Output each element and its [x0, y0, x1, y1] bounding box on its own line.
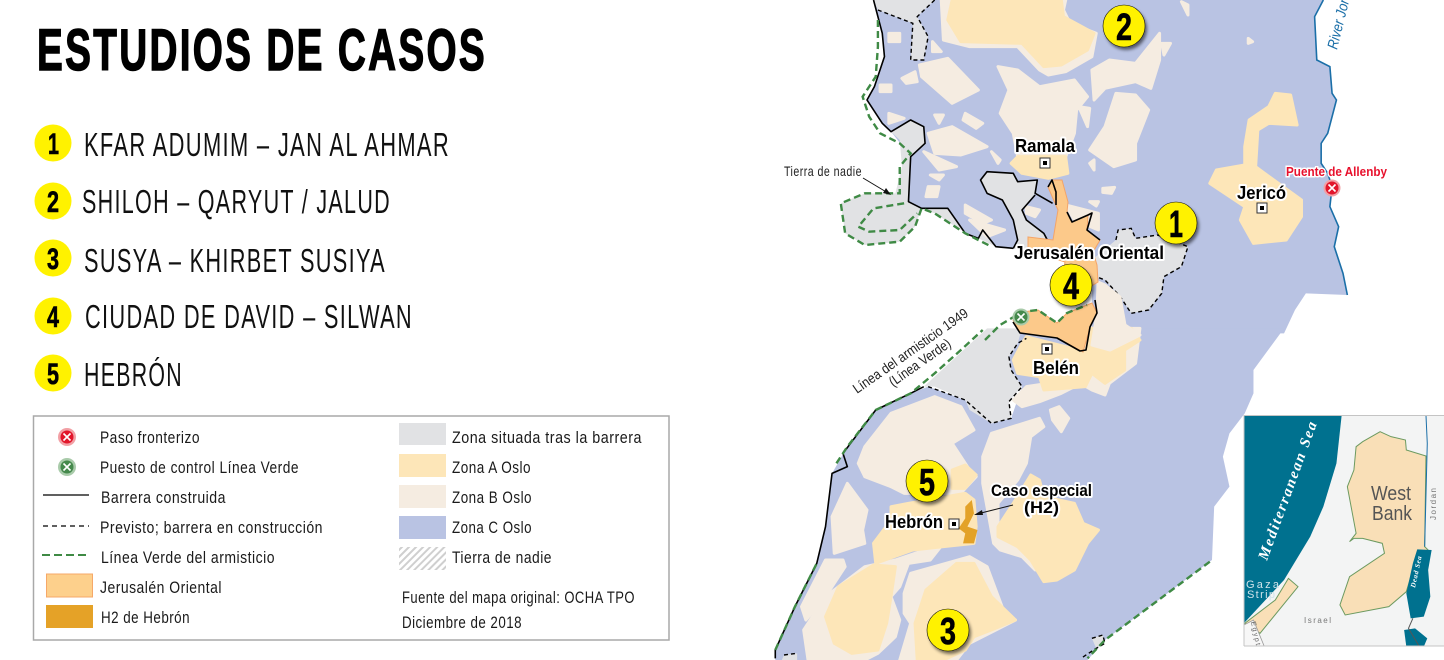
legend: zone b: Zona B Oslo: [452, 488, 532, 507]
crossing: Puente de Allenby: [1286, 164, 1388, 196]
inset label: egypt: Egypt: [1249, 621, 1261, 646]
inset label: jordan: Jordan: [1429, 488, 1438, 520]
city: Jericó: Jericó: [1237, 183, 1286, 203]
marker 1: 1: [1169, 204, 1183, 246]
annotation: armistice line: Línea del armisticio 1949: [850, 305, 971, 396]
city: Ramala: [1015, 136, 1076, 168]
crossing: Puente de Allenby: Puente de Allenby: [1286, 164, 1388, 179]
marker 3: 3: [940, 611, 956, 653]
legend: east jerusalem: Jerusalén Oriental: [100, 578, 222, 597]
city: Jericó: [1237, 183, 1286, 213]
city: Belén: [1033, 344, 1079, 378]
inset border: [1244, 416, 1444, 646]
annotation: armistice line: (Línea Verde): [886, 335, 954, 389]
case 2: 2: [47, 186, 59, 219]
legend: source: Diciembre de 2018: [402, 613, 522, 632]
legend: h2 hebron: [46, 605, 190, 628]
legend: source: Fuente del mapa original: OCHA TPO: [402, 588, 635, 607]
legend: border crossing: [58, 428, 200, 447]
marker 1: [1155, 202, 1199, 247]
city: Belén: Belén: [1033, 358, 1079, 378]
legend: no man's land: Tierra de nadie: [452, 548, 552, 567]
panel: legend: [34, 416, 669, 640]
case 5: [34, 354, 183, 393]
legend: green line checkpoint: Puesto de control Línea Verde: [100, 458, 299, 477]
case 3: SUSYA – KHIRBET SUSIYA: [84, 242, 386, 279]
case 2: [34, 182, 391, 220]
city: Hebrón: Hebrón: [885, 512, 943, 532]
legend: green line checkpoint: [58, 458, 299, 477]
title: ESTUDIOS DE CASOS: [37, 18, 487, 83]
north map shapes: [841, 0, 1347, 333]
legend: built barrier: Barrera construida: [101, 488, 226, 507]
case 1: 1: [48, 128, 59, 161]
map: west bank zones: [775, 0, 1347, 660]
marker 5: 5: [919, 462, 935, 504]
case 5: 5: [47, 358, 59, 391]
marker 2: [1103, 5, 1147, 50]
inset label: gaza strip: Strip: [1247, 589, 1275, 601]
inset locator map: [1244, 415, 1444, 647]
case 4: CIUDAD DE DAVID – SILWAN: [85, 298, 413, 335]
inset label: mediterranean sea: Mediterranean Sea: [1255, 419, 1321, 563]
legend: east jerusalem: [46, 574, 222, 597]
legend: no man's land: [399, 547, 552, 570]
south map shapes: [775, 328, 1284, 660]
legend: source: [402, 588, 635, 632]
inset label: gaza strip: [1246, 579, 1280, 601]
legend: zone c: Zona C Oslo: [452, 518, 532, 537]
annotation: caso especial H2: (H2): [1024, 498, 1059, 517]
inset label: gaza strip: Gaza: [1246, 579, 1280, 591]
inset label: dead sea: Dead Sea: [1409, 555, 1424, 589]
marker 4: [1050, 264, 1094, 309]
case 2: SHILOH – QARYUT / JALUD: [82, 183, 391, 220]
city: Ramala: Ramala: [1015, 136, 1076, 156]
legend: planned barrier: Previsto; barrera en construcción: [100, 518, 323, 537]
city: Jerusalén Oriental: Jerusalén Oriental: [1014, 243, 1164, 263]
case 1: KFAR ADUMIM – JAN AL AHMAR: [84, 126, 450, 163]
inset label: west bank: Bank: [1372, 503, 1413, 525]
marker 3: [927, 609, 971, 654]
case 4: 4: [47, 301, 59, 334]
checkpoint: green line: [1012, 308, 1030, 326]
case 1: [34, 124, 450, 163]
marker 2: 2: [1116, 7, 1132, 49]
marker 5: [906, 460, 950, 505]
inset label: west bank: West: [1371, 483, 1411, 505]
annotation: tierra de nadie: Tierra de nadie: [784, 163, 862, 179]
inset label: west bank: [1371, 483, 1413, 525]
legend: seam zone: Zona situada tras la barrera: [452, 428, 642, 447]
case 4: [34, 298, 413, 335]
legend: zone a: Zona A Oslo: [452, 458, 531, 477]
annotation: caso especial H2: Caso especial: [991, 481, 1092, 500]
annotation: tierra de nadie: [784, 163, 891, 195]
east jerusalem area: [985, 180, 1140, 352]
legend: zone b: [399, 485, 532, 508]
legend: zone a: [399, 454, 531, 477]
case 5: HEBRÓN: [84, 356, 183, 393]
legend: h2 hebron: H2 de Hebrón: [101, 608, 190, 627]
legend: green line: Línea Verde del armisticio: [101, 548, 275, 567]
legend: zone c: [399, 516, 532, 539]
annotation: caso especial H2: [974, 481, 1092, 517]
marker 4: 4: [1063, 266, 1079, 308]
inset label: israel: Israel: [1304, 616, 1331, 625]
legend: border crossing: Paso fronterizo: [100, 428, 200, 447]
case 3: 3: [47, 243, 59, 276]
legend: seam zone: [399, 423, 642, 447]
case 3: [34, 240, 386, 279]
case study list: [34, 124, 450, 393]
